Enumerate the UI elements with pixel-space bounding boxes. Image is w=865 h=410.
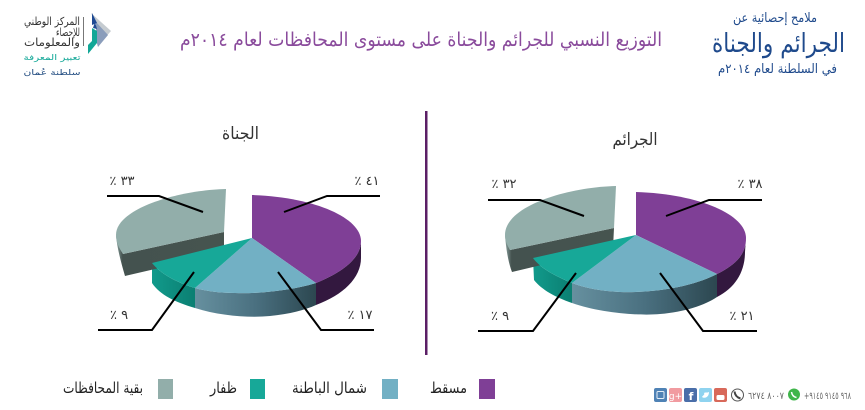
panel: crimes pie xyxy=(478,130,763,331)
contact footer xyxy=(654,388,851,403)
panel: offenders pie xyxy=(98,124,380,330)
legend: rest of governorates: بقية المحافظات xyxy=(63,379,143,397)
callout: Muscat 41: ٤١ ٪ xyxy=(354,174,380,189)
pie chart: offenders xyxy=(116,189,361,317)
callout: Muscat 38: ٣٨ ٪ xyxy=(737,177,763,192)
icon: google plus: g+ xyxy=(669,392,682,402)
callout: North Batinah 17: ١٧ ٪ xyxy=(347,308,373,323)
icon: phone xyxy=(732,389,744,401)
legend xyxy=(63,379,495,399)
pie chart: crimes xyxy=(505,186,746,315)
callout: others 33 xyxy=(107,174,203,212)
legend: North Batinah: شمال الباطنة xyxy=(292,379,367,397)
callout: North Batinah 21 xyxy=(660,273,757,331)
callout: Dhofar 9 xyxy=(98,272,194,330)
callout: others 33: ٣٣ ٪ xyxy=(109,174,135,189)
callout: Dhofar 9 xyxy=(478,273,576,331)
divider xyxy=(425,111,428,355)
heading: crimes: الجرائم xyxy=(612,130,658,150)
icon: instagram xyxy=(654,388,667,402)
icon: facebook: f xyxy=(689,390,694,403)
callout: North Batinah 21: ٢١ ٪ xyxy=(729,309,755,324)
callout: others 32 xyxy=(488,177,584,216)
icon: twitter xyxy=(699,388,712,402)
callout: Muscat 38 xyxy=(666,177,763,216)
whatsapp number: +٩٦٨ ٩١٤٥ ٩١٤٥ xyxy=(804,391,851,402)
header line 3: في السلطنة لعام ٢٠١٤م xyxy=(718,62,837,77)
logo xyxy=(24,13,111,77)
callout: Muscat 41 xyxy=(284,174,380,212)
logo name text xyxy=(24,15,80,49)
icon: whatsapp xyxy=(788,388,800,400)
icon: youtube xyxy=(714,388,727,402)
callout: North Batinah 17 xyxy=(278,272,374,330)
main title: التوزيع النسبي للجرائم والجناة على مستوى المحافظات لعام ٢٠١٤م xyxy=(180,29,662,51)
legend: Muscat: مسقط xyxy=(430,379,467,397)
logo name text: والمعلومات xyxy=(24,36,80,49)
legend: Dhofar: ظفار xyxy=(209,379,237,397)
header line 1: ملامح إحصائية عن xyxy=(733,11,817,26)
heading: offenders: الجناة xyxy=(222,124,259,144)
callout: Dhofar 9: ٩ ٪ xyxy=(110,308,128,323)
legend: Muscat xyxy=(430,379,495,399)
header block xyxy=(712,11,845,77)
logo mark xyxy=(83,13,111,54)
logo name text: للإحصاء xyxy=(56,26,80,39)
icon: facebook xyxy=(684,388,697,403)
logo slogan: تعبير المعرفة xyxy=(24,53,80,62)
logo country: سلطنة عُمان xyxy=(24,68,81,77)
logo name text: المركز الوطني xyxy=(24,15,80,28)
callout: others 32: ٣٢ ٪ xyxy=(491,177,517,192)
phone number: ٨٠٠٧ ٦٢٧٤ xyxy=(748,391,784,402)
legend: Dhofar xyxy=(209,379,265,399)
callout: Dhofar 9: ٩ ٪ xyxy=(491,309,509,324)
